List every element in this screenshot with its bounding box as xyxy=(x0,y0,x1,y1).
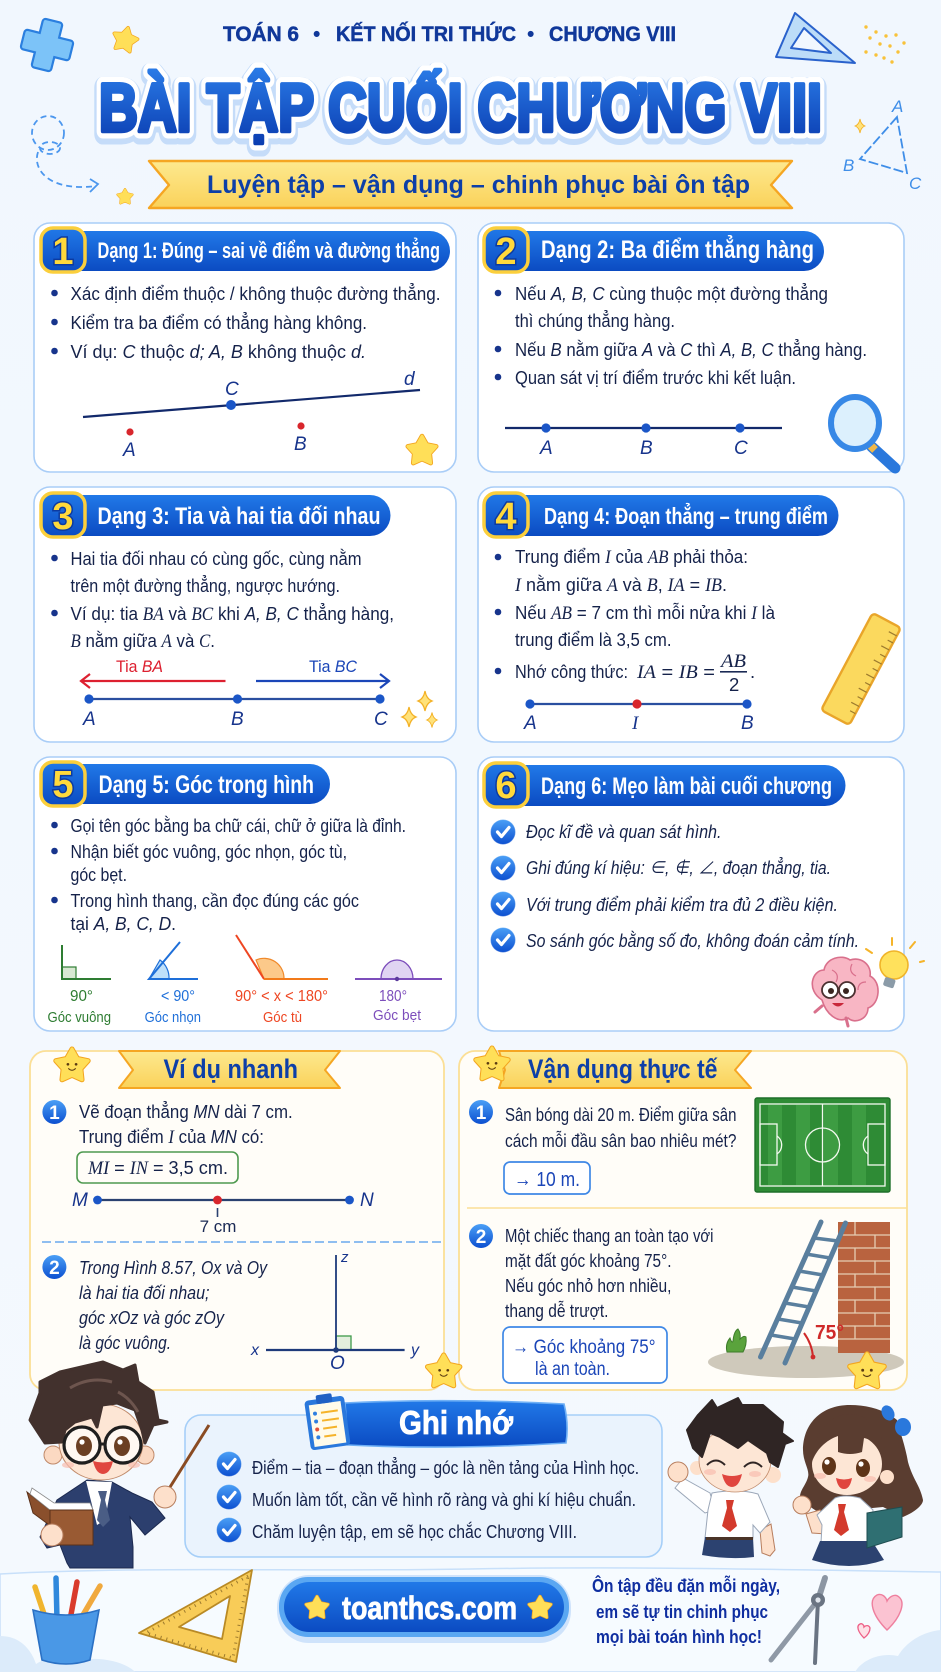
icon: ruler xyxy=(821,613,901,725)
bullet list: Nếu AB = 7 cm thì mỗi nửa khi I là xyxy=(515,602,776,624)
bullet list: Ví dụ: tia BA và BC khi A, B, C thẳng hàng, xyxy=(70,603,394,625)
pointer xyxy=(160,1425,209,1503)
panel: Dạng 6 xyxy=(478,757,924,1031)
diagram: opposite rays: C xyxy=(374,709,388,730)
fringe xyxy=(812,1414,887,1470)
heading: Dạng 2: 2 xyxy=(495,231,517,273)
ground xyxy=(708,1346,904,1378)
icon: set square xyxy=(776,13,855,63)
diagram: axes xOy xyxy=(250,1249,420,1374)
hair xyxy=(687,1398,793,1467)
diagram: line d: d xyxy=(404,369,416,390)
diagram: opposite rays xyxy=(81,657,389,730)
book xyxy=(867,1507,902,1548)
diagram: axes xOy: O xyxy=(330,1353,345,1374)
bullet list: 2 xyxy=(729,674,739,695)
icon: dashed triangle ABC: B xyxy=(843,156,854,175)
example 1: Vẽ đoạn thẳng MN dài 7 cm. xyxy=(79,1101,293,1122)
bullet list xyxy=(495,546,776,695)
icon: small star xyxy=(118,189,132,203)
bullet list xyxy=(495,283,867,388)
bullet list: Kiểm tra ba điểm có thẳng hàng không. xyxy=(70,312,367,333)
head xyxy=(687,1398,793,1492)
star mascot xyxy=(476,1048,508,1079)
ladder scene xyxy=(708,1222,904,1378)
icon: sparkles xyxy=(402,691,437,728)
diagram: obtuse angle: Góc tù xyxy=(263,1009,302,1026)
answer box: → Góc khoảng 75° xyxy=(512,1337,656,1358)
example 2 xyxy=(42,1249,420,1374)
problem 1: 1 xyxy=(476,1103,487,1124)
problem 2: thang dễ trượt. xyxy=(505,1300,608,1321)
diagram: line d xyxy=(83,369,420,461)
panel: Vận dụng thực tế xyxy=(459,1048,907,1390)
panel: Dạng 3 xyxy=(34,487,456,742)
tie xyxy=(722,1500,737,1532)
answer box: là an toàn. xyxy=(535,1359,610,1380)
problem 2: Nếu góc nhỏ hơn nhiều, xyxy=(505,1275,672,1296)
star mascot xyxy=(56,1049,88,1080)
icon: magnifier xyxy=(831,397,895,468)
example 2: là góc vuông. xyxy=(79,1332,171,1353)
icon: dashed arrow head xyxy=(90,179,98,192)
bullet list: Trong hình thang, cần đọc đúng các góc xyxy=(70,890,359,911)
icon: compass xyxy=(771,1578,825,1663)
example 2: góc xOz và góc zOy xyxy=(79,1307,226,1328)
icon: gold set square xyxy=(139,1570,252,1662)
diagram: straight angle: 180° xyxy=(379,988,407,1005)
bullet list: Hai tia đối nhau có cùng gốc, cùng nằm xyxy=(70,548,362,569)
bullet list: Xác định điểm thuộc / không thuộc đường thẳng. xyxy=(70,283,440,304)
diagram: axes xOy: x xyxy=(250,1342,260,1359)
arrow: ray BC: Tia BC xyxy=(309,657,358,676)
problem 2: Một chiếc thang an toàn tạo với xyxy=(505,1225,714,1246)
heading: Dạng 6: 6 xyxy=(495,765,517,807)
checklist xyxy=(216,1452,639,1542)
footer band xyxy=(0,1568,941,1672)
icon: yellow star xyxy=(111,25,140,53)
mouth xyxy=(93,1461,113,1474)
example 1: Trung điểm I của MN có: xyxy=(79,1126,264,1148)
book xyxy=(27,1488,93,1546)
heading: Dạng 4: Dạng 4: Đoạn thẳng – trung điểm xyxy=(544,501,828,529)
bullet list: trung điểm là 3,5 cm. xyxy=(515,629,672,650)
panel: Dạng 1 xyxy=(34,223,456,472)
example 2: là hai tia đối nhau; xyxy=(79,1282,210,1303)
bullet list xyxy=(51,548,394,652)
hair xyxy=(30,1362,167,1443)
heading: Dạng 3: Dạng 3: Tia và hai tia đối nhau xyxy=(98,503,380,530)
diagram: right angle: 90° xyxy=(70,988,93,1005)
website button xyxy=(277,1575,571,1643)
face xyxy=(707,1460,762,1467)
heading: Dạng 2: Dạng 2: Ba điểm thẳng hàng xyxy=(541,233,814,264)
example 2: Trong Hình 8.57, Ox và Oy xyxy=(79,1257,268,1278)
top line: • xyxy=(313,23,320,46)
icon: dots xyxy=(864,25,906,64)
icon: dashed triangle ABC xyxy=(843,97,922,193)
bullet list: thì chúng thẳng hàng. xyxy=(515,310,675,331)
bullet list: Gọi tên góc bằng ba chữ cái, chữ ở giữa là đỉnh. xyxy=(70,815,406,836)
diagram: obtuse angle: 90° < x < 180° xyxy=(235,988,328,1005)
closing message: Ôn tập đều đặn mỗi ngày, xyxy=(592,1575,780,1596)
heading: Dạng 3: 3 xyxy=(52,496,74,538)
diagram: midpoint xyxy=(523,699,754,734)
brick wall xyxy=(838,1222,890,1353)
icon: dashed loop arrow xyxy=(32,116,96,187)
top line xyxy=(223,22,676,46)
checklist: Muốn làm tốt, cần vẽ hình rõ ràng và ghi kí hiệu chuẩn. xyxy=(252,1489,636,1510)
icon: dashed triangle ABC: C xyxy=(909,174,922,193)
bullet list: Ví dụ: C thuộc d; A, B không thuộc d. xyxy=(70,341,366,362)
bullet list: trên một đường thẳng, ngược hướng. xyxy=(70,575,340,596)
angle label 75° xyxy=(804,1322,844,1359)
bullet list: Trung điểm I của AB phải thỏa: xyxy=(515,546,748,568)
bullet list: AB xyxy=(719,652,746,672)
eyes and mouth xyxy=(822,1457,836,1475)
bullet list: Nhớ công thức: xyxy=(515,661,628,682)
heading: Dạng 5: Dạng 5: Góc trong hình xyxy=(99,771,314,799)
heading: Dạng 3 xyxy=(41,493,390,538)
checklist: Chăm luyện tập, em sẽ học chắc Chương VIII. xyxy=(252,1521,577,1542)
problem 1: cách mỗi đầu sân bao nhiêu mét? xyxy=(505,1130,736,1151)
angle label 75°: 75° xyxy=(815,1322,844,1344)
tie xyxy=(834,1504,849,1536)
arrow: ray BC xyxy=(256,657,389,688)
top line: • xyxy=(527,23,534,46)
answer box xyxy=(77,1152,238,1183)
bullet list: tại A, B, C, D. xyxy=(70,913,176,934)
subtitle ribbon xyxy=(149,161,792,208)
closing message: mọi bài toán hình học! xyxy=(596,1626,762,1647)
glasses xyxy=(64,1427,141,1463)
illustration: teacher xyxy=(27,1362,209,1568)
checklist: Ghi đúng kí hiệu: ∈, ∉, ∠, đoạn thẳng, tia. xyxy=(526,857,831,878)
diagram: axes xOy: z xyxy=(340,1249,349,1266)
diagram: obtuse angle xyxy=(235,935,328,1026)
problem 2: mặt đất góc khoảng 75°. xyxy=(505,1250,672,1271)
heading ribbon xyxy=(345,1401,567,1447)
diagram: midpoint: A xyxy=(523,713,537,734)
lower arm xyxy=(760,1524,775,1556)
checklist xyxy=(490,820,859,952)
closing message: em sẽ tự tin chinh phục xyxy=(596,1601,768,1622)
shirt xyxy=(705,1491,770,1538)
panel: Dạng 2 xyxy=(478,223,904,472)
illustration: boy student xyxy=(668,1398,793,1558)
shirt xyxy=(817,1496,873,1543)
checklist: Đọc kĩ đề và quan sát hình. xyxy=(526,821,722,842)
problem 2 xyxy=(469,1222,904,1383)
diagram: three collinear points: B xyxy=(640,438,653,459)
diagram: acute angle: < 90° xyxy=(161,988,195,1005)
panel: Ghi nhớ xyxy=(185,1391,662,1557)
checklist: So sánh góc bằng số đo, không đoán cảm tính. xyxy=(526,930,859,951)
answer box: MI = IN = 3,5 cm. xyxy=(87,1157,228,1179)
diagram: acute angle: Góc nhọn xyxy=(145,1009,201,1026)
closing message xyxy=(592,1575,780,1647)
hand xyxy=(154,1486,176,1508)
subtitle ribbon: Luyện tập – vận dụng – chinh phục bài ôn tập xyxy=(207,171,750,199)
bullet list: Nếu B nằm giữa A và C thì A, B, C thẳng hàng. xyxy=(515,339,867,360)
ribbon heading: Ví dụ nhanh xyxy=(164,1054,298,1084)
diagram: line d: C xyxy=(225,379,239,400)
arm and fist xyxy=(806,1510,828,1534)
diagram: midpoint: I xyxy=(631,713,640,734)
bullet list: góc bẹt. xyxy=(70,864,127,885)
checklist: Điểm – tia – đoạn thẳng – góc là nền tảng của Hình học. xyxy=(252,1457,639,1478)
problem 2: 2 xyxy=(476,1227,486,1248)
trousers xyxy=(702,1537,754,1558)
heading: Dạng 1: 1 xyxy=(52,231,74,273)
heading: Dạng 5: 5 xyxy=(52,764,74,806)
arm and fist xyxy=(675,1478,715,1513)
bullet list: Quan sát vị trí điểm trước khi kết luận. xyxy=(515,367,796,388)
skirt xyxy=(812,1541,884,1566)
diagram: midpoint: B xyxy=(741,713,754,734)
icon: clipboard xyxy=(304,1391,351,1451)
example 1 xyxy=(42,1100,374,1236)
ribbon heading xyxy=(119,1051,340,1088)
problem 1 xyxy=(469,1098,890,1194)
heading: Dạng 1 xyxy=(41,228,450,273)
example 1: 1 xyxy=(49,1103,60,1124)
answer box xyxy=(504,1162,590,1194)
icon: blue plus xyxy=(17,15,77,75)
example 2: 2 xyxy=(49,1258,60,1279)
icon: pencil cup xyxy=(33,1578,100,1664)
bullet list: Nếu A, B, C cùng thuộc một đường thẳng xyxy=(515,283,828,304)
back hair xyxy=(800,1405,923,1517)
arrow: ray BA xyxy=(81,657,226,688)
arrow: ray BA: Tia BA xyxy=(116,657,163,676)
bullet list xyxy=(51,815,406,934)
diagram: straight angle xyxy=(355,960,442,1024)
diagram: line d: A xyxy=(122,440,136,461)
website button: toanthcs.com xyxy=(342,1590,517,1626)
heading: Dạng 4: 4 xyxy=(495,496,517,538)
heading: Dạng 2 xyxy=(484,228,824,273)
diagram: line d: B xyxy=(294,434,307,455)
panel: Dạng 4 xyxy=(478,487,904,742)
heading: Dạng 5 xyxy=(41,762,330,806)
heading: Dạng 6 xyxy=(484,763,845,807)
diagram: right angle: Góc vuông xyxy=(48,1009,111,1026)
answer box xyxy=(503,1327,667,1383)
diagram: three collinear points: A xyxy=(539,438,553,459)
bullet list: IA = IB = xyxy=(636,661,715,683)
cloud left xyxy=(0,1636,135,1672)
icon: brain mascot xyxy=(812,957,878,1026)
diagram: segment MN xyxy=(72,1190,374,1236)
diagram: segment MN: 7 cm xyxy=(200,1217,236,1236)
top line: TOÁN 6 xyxy=(223,23,299,46)
top line: KẾT NỐI TRI THỨC xyxy=(336,22,516,46)
suit xyxy=(40,1480,165,1568)
bullet list: . xyxy=(750,661,755,682)
icon: light bulb xyxy=(866,938,924,989)
diagram: right angle xyxy=(48,945,111,1026)
header decorations xyxy=(17,13,922,203)
panel: Dạng 5 xyxy=(34,757,456,1031)
answer box: → 10 m. xyxy=(514,1169,580,1191)
problem 1: Sân bóng dài 20 m. Điểm giữa sân xyxy=(505,1104,736,1125)
bullet list: I nằm giữa A và B, IA = IB. xyxy=(514,574,727,596)
icon: star xyxy=(408,436,436,463)
shirt and tie xyxy=(86,1481,112,1527)
ladder xyxy=(760,1222,846,1363)
star mascots at panel bottoms xyxy=(428,1354,884,1387)
bush xyxy=(726,1329,746,1352)
bullet list xyxy=(51,283,440,362)
icon: dashed triangle ABC: A xyxy=(891,97,903,116)
head xyxy=(30,1362,167,1480)
heading ribbon: Ghi nhớ xyxy=(399,1404,513,1441)
diagram: opposite rays: A xyxy=(82,709,96,730)
ribbon heading: Vận dụng thực tế xyxy=(528,1054,718,1084)
bullet list: B nằm giữa A và C. xyxy=(70,630,215,652)
diagram: three collinear points: C xyxy=(734,438,748,459)
bow xyxy=(879,1403,911,1436)
bullet list: Nhận biết góc vuông, góc nhọn, góc tù, xyxy=(70,841,347,862)
diagram: segment MN: N xyxy=(360,1190,374,1211)
diagram: straight angle: Góc bẹt xyxy=(373,1007,422,1024)
illustration: girl student xyxy=(793,1403,923,1566)
diagram: acute angle xyxy=(145,942,201,1026)
diagram: axes xOy: y xyxy=(410,1342,420,1359)
head xyxy=(812,1403,911,1495)
diagram: segment MN: M xyxy=(72,1190,88,1211)
icon: hearts xyxy=(858,1594,902,1638)
checklist: Với trung điểm phải kiểm tra đủ 2 điều kiện. xyxy=(526,894,838,915)
diagram: three collinear points xyxy=(505,423,782,459)
heading: Dạng 4 xyxy=(484,493,838,538)
heading: Dạng 1: Dạng 1: Đúng – sai về điểm và đường thẳng xyxy=(98,238,440,263)
top line: CHƯƠNG VIII xyxy=(549,23,676,46)
panel: Ví dụ nhanh xyxy=(30,1049,444,1390)
cloud right xyxy=(855,1630,941,1672)
football field xyxy=(755,1098,890,1192)
diagram: opposite rays: B xyxy=(231,709,244,730)
heading: Dạng 6: Dạng 6: Mẹo làm bài cuối chương xyxy=(541,773,832,800)
